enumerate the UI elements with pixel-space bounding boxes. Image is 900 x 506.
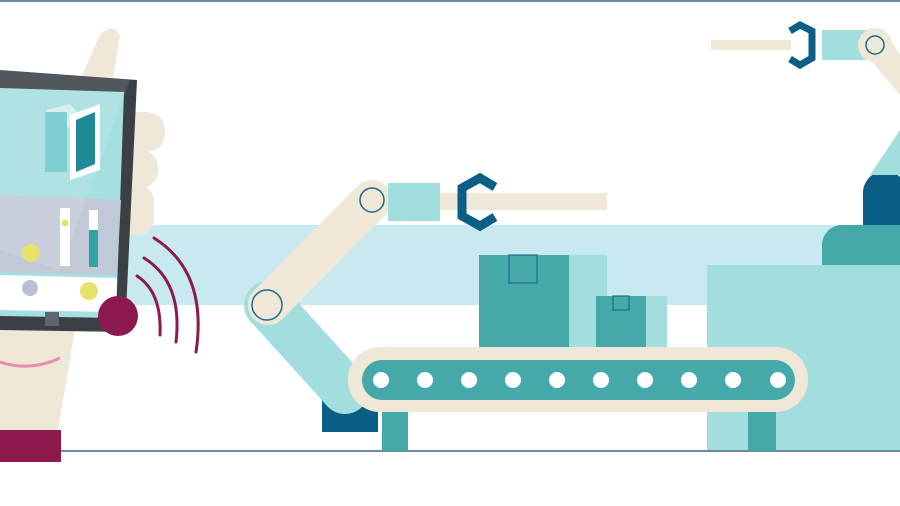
background band: [120, 225, 900, 305]
right robot arm top: [711, 25, 892, 65]
icon: signal waves: [137, 238, 198, 352]
boxes: [479, 255, 667, 347]
hand holding phone: [0, 28, 165, 462]
conveyor belt: [348, 347, 808, 451]
right machine: [707, 30, 900, 450]
middle robot arm: [252, 178, 607, 432]
